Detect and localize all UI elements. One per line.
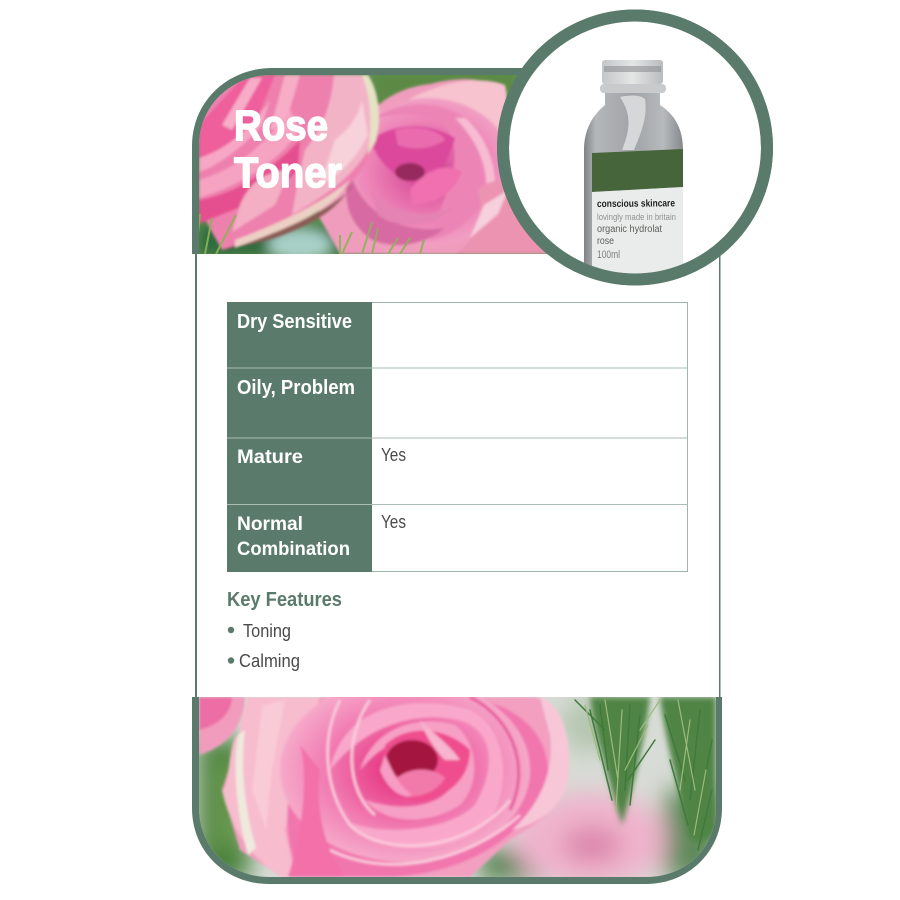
left rose [199, 75, 379, 250]
row labels column: Normal [237, 514, 303, 535]
infographic: rose toner card [192, 10, 773, 884]
upper left rose [199, 697, 245, 755]
icon: bottle: conscious skincare [597, 198, 675, 210]
row labels column [227, 302, 688, 572]
card frame [192, 68, 722, 884]
table: skin type suitability [227, 302, 688, 572]
row labels column: Combination [237, 539, 350, 560]
right rose [318, 77, 478, 254]
value: mature yes: Yes [381, 445, 406, 465]
icon: bottle [584, 60, 683, 290]
row labels column: Mature [237, 447, 303, 468]
main rose [222, 697, 569, 877]
bottle label [592, 149, 683, 192]
photo: bottom rose [199, 697, 716, 877]
row labels column: Dry Sensitive [237, 311, 352, 333]
grass blades [196, 214, 424, 254]
photo: top roses [199, 75, 547, 254]
icon: bottle: lovingly made in britain [597, 212, 676, 223]
icon: bottle: 100ml [597, 249, 620, 261]
fern fronds [575, 700, 712, 850]
fern clusters [590, 697, 716, 842]
icon: bottle: organic hydrolat [597, 224, 662, 235]
title: Toner [234, 149, 342, 197]
key features list [228, 621, 300, 671]
icon: bottle: rose [597, 236, 614, 247]
key features heading: Key Features [227, 589, 342, 611]
title [234, 102, 342, 197]
value: normal combination yes: Yes [381, 512, 406, 532]
product circle [503, 16, 767, 290]
row labels column: Oily, Problem [237, 377, 355, 399]
key features list: Toning [243, 621, 291, 641]
title: Rose [234, 102, 328, 150]
key features list: Calming [239, 651, 300, 671]
